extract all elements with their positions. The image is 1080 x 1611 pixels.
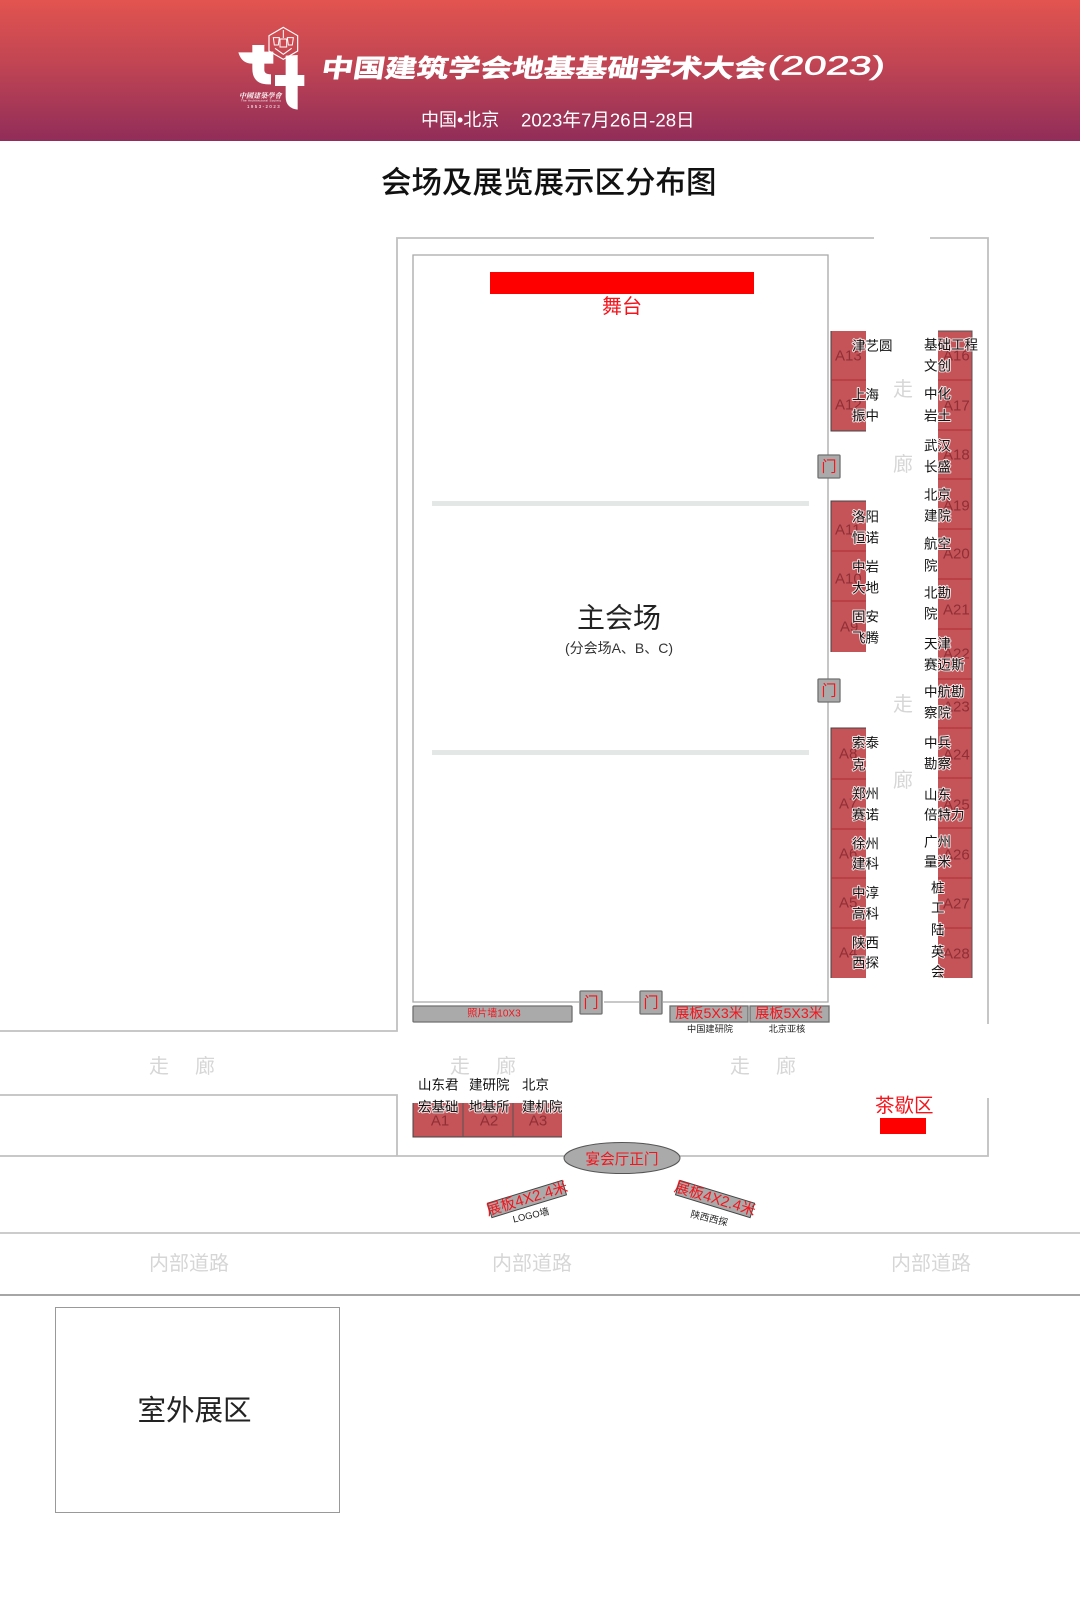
- venue outer walls: [0, 238, 988, 1156]
- corridor labels: horizontal: 廊: [776, 1055, 796, 1078]
- outdoor exhibition area: [56, 1308, 340, 1512]
- booths: right column A16-A28: 会: [931, 964, 944, 980]
- booths: left column lower A8-A4: 徐州: [852, 836, 879, 852]
- doors: 门: [643, 994, 659, 1012]
- booths: right column A16-A28: A23: [943, 698, 970, 716]
- icon: conference logo: The Architectural Society: [241, 99, 281, 103]
- booths: right column A16-A28: 院: [924, 606, 938, 622]
- angled panel: LOGO wall: 展板4X2.4米: [484, 1178, 570, 1219]
- booths: right column A16-A28: 文创: [924, 358, 951, 374]
- booths: left column lower A8-A4: 建科: [852, 856, 880, 872]
- doors: [580, 455, 840, 1014]
- booths: right column A16-A28: A24: [943, 746, 970, 764]
- banner location and date: [421, 110, 695, 130]
- booths: right column A16-A28: 察院: [924, 704, 952, 720]
- banner title: (2023): [766, 51, 887, 81]
- internal road: 内部道路: [891, 1252, 971, 1275]
- booths: left column middle A11-A9: A11: [835, 522, 861, 538]
- display panels 5x3: [670, 1006, 829, 1034]
- booths: bottom row A1-A3: 北京: [522, 1078, 549, 1092]
- booths: right column A16-A28: A27: [943, 896, 970, 912]
- booths: right column A16-A28: 北勘: [924, 586, 951, 600]
- booths: right column A16-A28: A21: [943, 602, 970, 618]
- outdoor exhibition area: 室外展区: [137, 1395, 252, 1427]
- booths: left column middle A11-A9: [831, 501, 880, 652]
- booths: right column A16-A28: A18: [943, 446, 970, 464]
- booths: right column A16-A28: 中化: [924, 386, 951, 402]
- booths: left column middle A11-A9: 洛阳: [852, 510, 879, 524]
- booths: left column lower A8-A4: A5: [839, 894, 857, 912]
- booths: left column lower A8-A4: [831, 728, 880, 978]
- corridor labels: vertical: [893, 378, 913, 792]
- angled panel: LOGO wall: LOGO墙: [512, 1205, 551, 1226]
- booths: right column A16-A28: [924, 331, 978, 980]
- booths: left column middle A11-A9: A10: [835, 570, 862, 588]
- main hall: [413, 255, 828, 1002]
- booths: right column A16-A28: 航空: [924, 536, 951, 552]
- booths: left column middle A11-A9: 恒诺: [852, 530, 879, 546]
- booths: left column middle A11-A9: 飞腾: [852, 630, 880, 646]
- photo wall: [413, 1006, 572, 1022]
- booths: right column A16-A28: 长盛: [924, 460, 951, 474]
- banquet hall main entrance: [564, 1142, 680, 1174]
- booths: left column lower A8-A4: 中淳: [852, 884, 879, 900]
- booths: left column middle A11-A9: A9: [840, 618, 858, 636]
- booths: bottom row A1-A3: [413, 1078, 563, 1137]
- doors: 门: [583, 994, 599, 1012]
- booths: right column A16-A28: 工: [931, 900, 944, 916]
- banner location and date: 中国•北京: [421, 110, 499, 130]
- corridor labels: vertical: 走: [893, 693, 913, 716]
- booths: right column A16-A28: 中兵: [924, 736, 951, 750]
- main hall label: 主会场: [577, 602, 661, 634]
- booths: left column lower A8-A4: 陕西: [852, 936, 879, 950]
- corridor labels: horizontal: 走: [730, 1055, 750, 1078]
- booths: left column lower A8-A4: 西探: [852, 956, 880, 970]
- header banner: [0, 0, 1080, 141]
- booths: bottom row A1-A3: A3: [529, 1112, 547, 1130]
- booths: left column lower A8-A4: 郑州: [852, 786, 879, 802]
- tea break area: [875, 1095, 934, 1134]
- display panels 5x3: 展板5X3米: [675, 1006, 743, 1022]
- booths: right column A16-A28: 基础工程: [924, 336, 978, 352]
- internal road: [0, 1233, 1080, 1295]
- booths: left column lower A8-A4: A7: [839, 796, 857, 812]
- photo wall: 照片墙10X3: [467, 1006, 521, 1020]
- corridor labels: vertical: 走: [893, 378, 913, 401]
- corridor labels: vertical: 廊: [893, 453, 913, 476]
- booths: right column A16-A28: A25: [943, 796, 970, 814]
- booths: bottom row A1-A3: 建研院: [469, 1078, 510, 1092]
- booths: bottom row A1-A3: 地基所: [469, 1098, 510, 1114]
- tea break area: 茶歇区: [875, 1095, 934, 1117]
- booths: left column lower A8-A4: 赛诺: [852, 808, 879, 822]
- booths: bottom row A1-A3: 山东君: [418, 1078, 458, 1092]
- booths: right column A16-A28: 量米: [924, 854, 952, 870]
- booths: right column A16-A28: 院: [924, 558, 938, 574]
- booths: right column A16-A28: A16: [943, 348, 970, 364]
- booths: right column A16-A28: 山东: [924, 788, 951, 802]
- booths: right column A16-A28: 武汉: [924, 438, 952, 454]
- stage: [490, 272, 754, 318]
- corridor labels: vertical: 廊: [893, 769, 913, 792]
- corridor labels: horizontal: 廊: [195, 1055, 215, 1078]
- sub-venue note: (分会场A、B、C): [565, 640, 673, 656]
- icon: conference logo: 1953-2023: [247, 104, 280, 109]
- booths: left column upper A13-A12: [831, 331, 892, 431]
- booths: bottom row A1-A3: 宏基础: [418, 1098, 458, 1114]
- booths: left column lower A8-A4: 高科: [852, 906, 880, 922]
- booths: right column A16-A28: A17: [943, 398, 970, 414]
- booths: right column A16-A28: 桩: [931, 880, 944, 896]
- booths: left column middle A11-A9: 固安: [852, 610, 879, 624]
- booths: left column middle A11-A9: 大地: [852, 580, 880, 596]
- booths: left column lower A8-A4: A4: [839, 944, 857, 962]
- corridor labels: horizontal: 走: [450, 1055, 470, 1078]
- internal road: 内部道路: [149, 1252, 229, 1275]
- banquet hall main entrance: 宴会厅正门: [586, 1150, 658, 1168]
- booths: left column upper A13-A12: A12: [835, 396, 862, 414]
- booths: right column A16-A28: 赛迈斯: [924, 658, 964, 672]
- display panels 5x3: 展板5X3米: [755, 1006, 823, 1022]
- icon: conference logo: [238, 27, 304, 110]
- booths: right column A16-A28: 建院: [924, 508, 952, 524]
- stage: 舞台: [602, 295, 642, 318]
- booths: left column lower A8-A4: 索泰: [852, 736, 880, 750]
- internal road: 内部道路: [492, 1252, 572, 1275]
- booths: bottom row A1-A3: A1: [431, 1112, 449, 1130]
- booths: right column A16-A28: A19: [943, 498, 970, 514]
- booths: left column lower A8-A4: A6: [839, 846, 857, 862]
- booths: left column upper A13-A12: 津艺圆: [852, 338, 892, 354]
- angled panel: Shaanxi survey: 展板4X2.4米: [672, 1178, 758, 1219]
- booths: right column A16-A28: 英: [931, 944, 945, 960]
- booths: right column A16-A28: 北京: [924, 488, 951, 502]
- booths: right column A16-A28: 陆: [931, 922, 944, 938]
- angled panel: Shaanxi survey: 陕西西探: [689, 1208, 729, 1229]
- booths: right column A16-A28: A20: [943, 546, 970, 562]
- booths: left column upper A13-A12: 上海: [852, 388, 879, 402]
- booths: left column lower A8-A4: A8: [839, 746, 857, 762]
- page heading: 会场及展览展示区分布图: [381, 158, 716, 202]
- booths: right column A16-A28: 天津: [924, 636, 951, 652]
- booths: right column A16-A28: A22: [943, 646, 970, 662]
- booths: left column upper A13-A12: A13: [835, 348, 862, 364]
- booths: left column upper A13-A12: 振中: [852, 408, 879, 424]
- booths: right column A16-A28: 广州: [924, 834, 951, 850]
- booths: left column middle A11-A9: 中岩: [852, 560, 879, 574]
- corridor labels: horizontal: [149, 1055, 796, 1078]
- corridor labels: horizontal: 走: [149, 1055, 169, 1078]
- banner location and date: 2023年7月26日-28日: [521, 110, 695, 130]
- booths: right column A16-A28: 倍特力: [924, 808, 964, 822]
- booths: right column A16-A28: 中航勘: [924, 684, 964, 700]
- corridor labels: horizontal: 廊: [496, 1055, 516, 1078]
- display panels 5x3: 中国建研院: [687, 1023, 733, 1034]
- display panels 5x3: 北京亚核: [769, 1023, 805, 1034]
- booths: right column A16-A28: 勘察: [924, 756, 952, 772]
- booths: right column A16-A28: A26: [943, 846, 970, 864]
- icon: conference logo: 中國建築學會: [239, 90, 283, 100]
- booths: left column lower A8-A4: 克: [852, 758, 866, 772]
- booths: right column A16-A28: A28: [943, 946, 970, 962]
- booths: bottom row A1-A3: A2: [480, 1112, 498, 1130]
- booths: bottom row A1-A3: 建机院: [522, 1100, 563, 1114]
- doors: 门: [821, 682, 837, 700]
- banner title: 中国建筑学会地基基础学术大会: [319, 49, 770, 85]
- doors: 门: [821, 458, 837, 476]
- booths: right column A16-A28: 岩土: [924, 408, 951, 424]
